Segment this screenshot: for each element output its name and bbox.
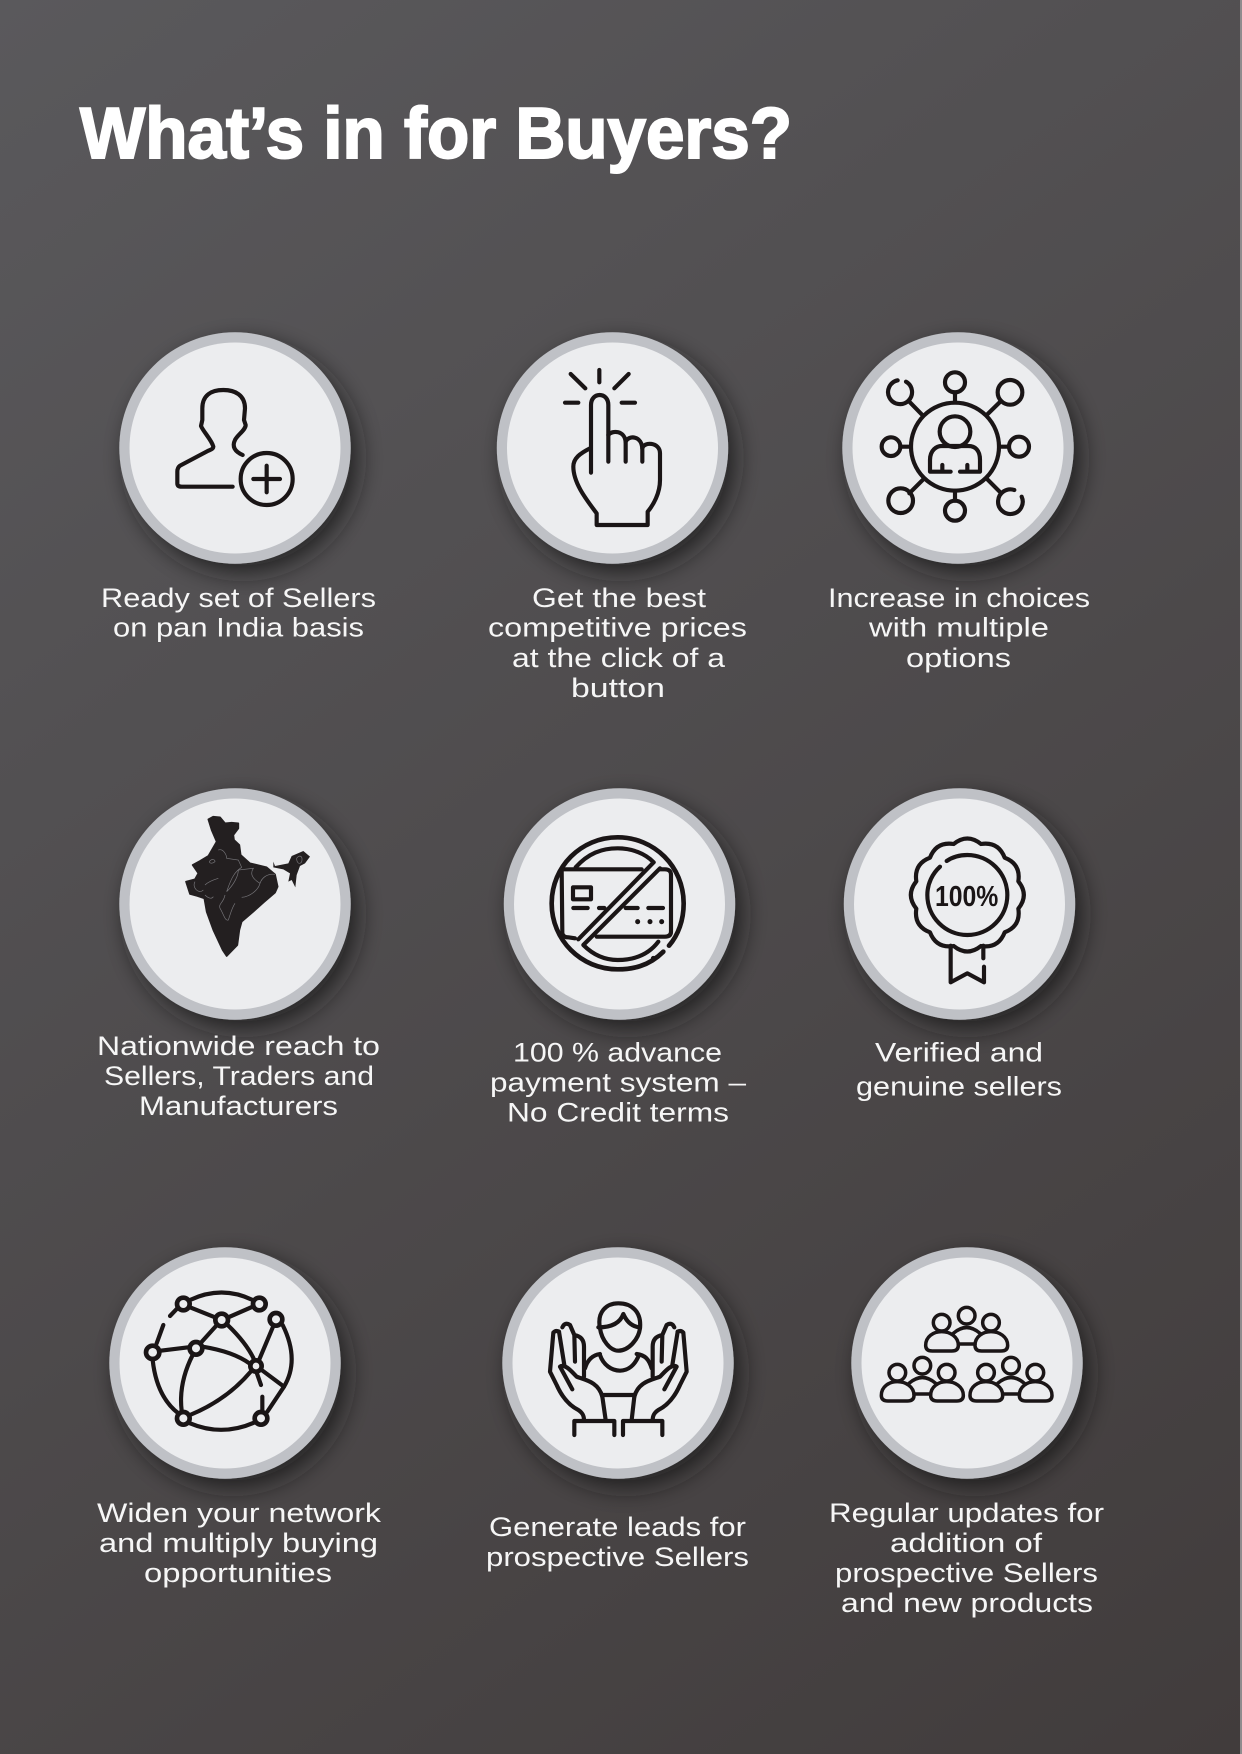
icon: groups of people bbox=[881, 1307, 1052, 1401]
caption: 100 % advance bbox=[513, 1038, 722, 1068]
badge circle bbox=[119, 788, 351, 1020]
caption: Manufacturers bbox=[139, 1091, 338, 1121]
icon: 100 percent rosette bbox=[911, 838, 1024, 982]
caption: at the click of a bbox=[512, 643, 726, 673]
panel: best competitive prices bbox=[488, 332, 747, 703]
caption: Sellers, Traders and bbox=[104, 1061, 374, 1091]
panel: verified sellers bbox=[844, 788, 1075, 1102]
badge circle bbox=[851, 1247, 1083, 1479]
panel: increase in choices bbox=[828, 332, 1090, 673]
panel: widen network bbox=[97, 1247, 382, 1588]
caption: Verified and bbox=[875, 1038, 1043, 1068]
caption bbox=[829, 1498, 1104, 1618]
caption: button bbox=[571, 673, 665, 703]
caption: Ready set of Sellers bbox=[101, 583, 376, 613]
caption bbox=[490, 1038, 746, 1128]
caption: with multiple bbox=[868, 612, 1049, 642]
icon: globe network bbox=[146, 1292, 292, 1430]
icon: network of people bbox=[882, 372, 1029, 521]
panel: generate leads bbox=[486, 1247, 749, 1572]
caption bbox=[828, 583, 1090, 673]
caption: No Credit terms bbox=[507, 1098, 729, 1128]
caption: Widen your network bbox=[97, 1498, 382, 1528]
caption: prospective Sellers bbox=[835, 1558, 1098, 1588]
panel: nationwide reach bbox=[97, 788, 380, 1121]
caption: Get the best bbox=[532, 583, 707, 613]
caption bbox=[486, 1512, 749, 1572]
caption: and multiply buying bbox=[99, 1528, 378, 1558]
caption: Nationwide reach to bbox=[97, 1031, 380, 1061]
icon: hand click bbox=[565, 370, 660, 525]
caption: addition of bbox=[890, 1528, 1043, 1558]
icon: user with plus bbox=[177, 390, 293, 505]
icon: map of India bbox=[186, 817, 310, 956]
caption: Generate leads for bbox=[489, 1512, 746, 1542]
badge circle bbox=[504, 788, 735, 1020]
caption bbox=[97, 1498, 382, 1588]
caption: Increase in choices bbox=[828, 583, 1090, 613]
caption: and new products bbox=[841, 1588, 1093, 1618]
caption bbox=[856, 1038, 1062, 1102]
title: What’s in for Buyers? bbox=[80, 94, 792, 174]
badge circle bbox=[497, 332, 728, 564]
caption: prospective Sellers bbox=[486, 1542, 749, 1572]
icon: 100 percent rosette: 100% bbox=[935, 881, 998, 913]
caption: Regular updates for bbox=[829, 1498, 1104, 1528]
panel: regular updates bbox=[829, 1247, 1104, 1618]
icon: no credit card bbox=[552, 837, 684, 969]
caption: genuine sellers bbox=[856, 1072, 1062, 1102]
caption bbox=[488, 583, 747, 703]
caption: competitive prices bbox=[488, 612, 747, 642]
badge circle bbox=[119, 332, 351, 564]
icon: hands holding person bbox=[550, 1303, 687, 1435]
panel: ready set of sellers bbox=[101, 332, 376, 642]
badge circle bbox=[109, 1247, 341, 1479]
caption: options bbox=[906, 643, 1011, 673]
caption: payment system – bbox=[490, 1068, 746, 1098]
caption bbox=[97, 1031, 380, 1121]
caption: opportunities bbox=[144, 1558, 332, 1588]
badge circle bbox=[502, 1247, 734, 1479]
badge circle bbox=[844, 788, 1075, 1020]
caption bbox=[101, 583, 376, 642]
caption: on pan India basis bbox=[113, 612, 364, 642]
badge circle bbox=[842, 332, 1074, 564]
panel: advance payment bbox=[490, 788, 746, 1128]
